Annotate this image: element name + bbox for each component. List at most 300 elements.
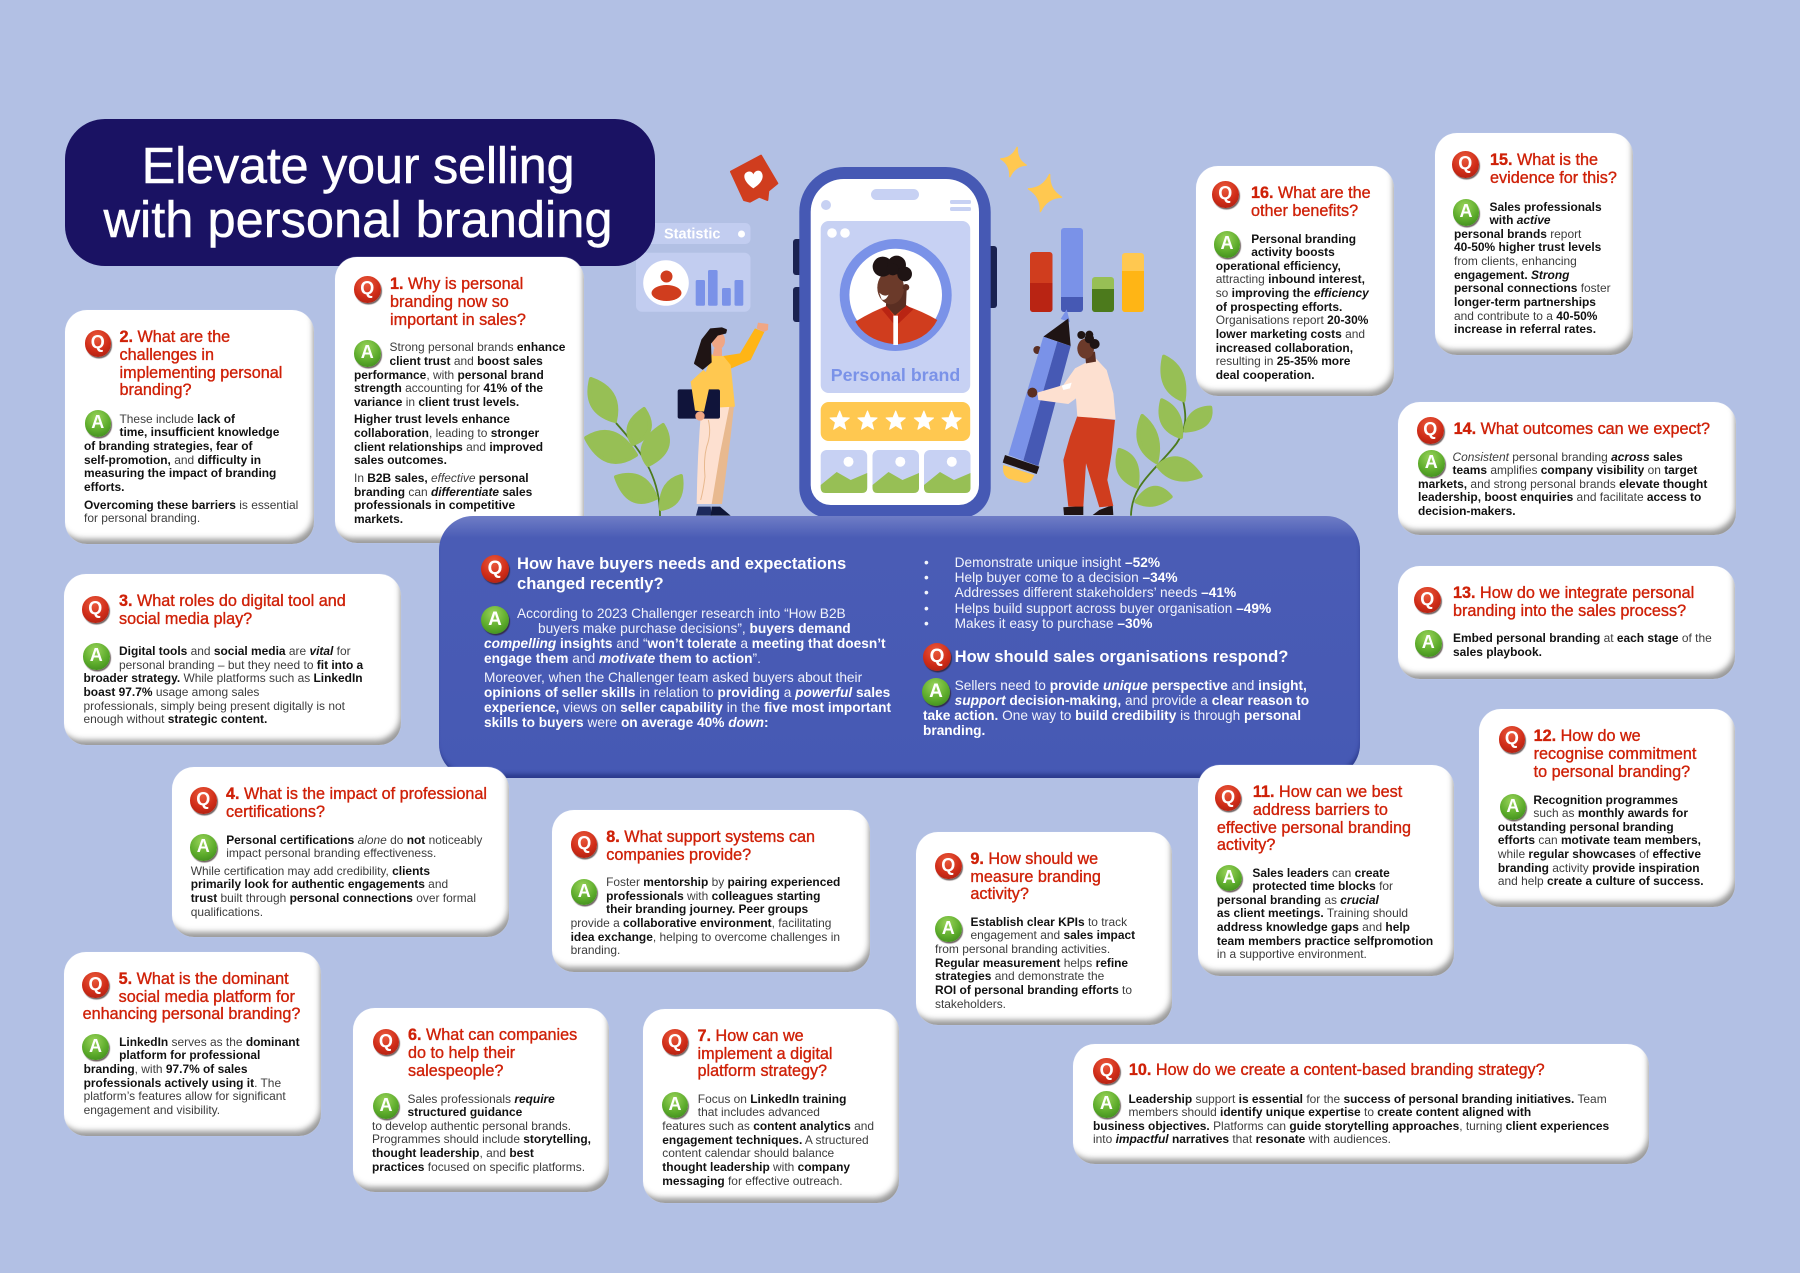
icon: Q badge: Q [668, 1031, 682, 1051]
heading: question 5 [83, 970, 300, 1023]
text: answer 2 [84, 412, 298, 525]
text: answer 9: Regular measurement helps refine [935, 956, 1128, 970]
text: answer 14: Consistent personal branding across sales [1452, 450, 1683, 464]
heading: question 4: certifications? [226, 803, 325, 821]
text: Challenger research answer: experience, views on seller capability in the five most important [484, 700, 891, 715]
text: answer 7: features such as content analytics and [662, 1119, 874, 1133]
heading: question 12: 12. How do we [1534, 727, 1641, 745]
icon: statistic widget [636, 223, 750, 312]
title banner: with personal branding [103, 190, 613, 248]
heading: question 1 [390, 275, 526, 329]
heading: question 5: enhancing personal branding? [83, 1005, 300, 1023]
text: answer 15: personal connections foster [1454, 281, 1611, 295]
text: answer 16: attracting inbound interest, [1216, 272, 1365, 286]
text: Challenger research answer: opinions of seller skills in relation to providing a powerful sales [484, 685, 890, 700]
text: answer 9: stakeholders. [935, 997, 1006, 1011]
text: answer 14: teams amplifies company visibility on target [1452, 463, 1697, 477]
text: answer 13 [1453, 631, 1712, 659]
text: answer 11: protected time blocks for [1252, 879, 1393, 893]
icon: Q badge: Q [930, 646, 944, 667]
panel: question 1 why personal branding matters [335, 257, 584, 543]
bar chart: coloured bars [1030, 228, 1144, 312]
text: answer 10 [1093, 1092, 1609, 1146]
text: answer 12: efforts can motivate team members, [1498, 833, 1701, 847]
icon: A badge [1214, 231, 1240, 258]
icon: Q badge [190, 787, 216, 814]
text: answer 12 [1498, 792, 1704, 888]
text: answer 1: client relationships and improved [354, 440, 543, 454]
panel: question 10 content strategy [1073, 1044, 1649, 1164]
icon: Q badge: Q [89, 974, 103, 994]
text: answer 16: Organisations report 20-30% [1216, 313, 1368, 327]
icon: profile portrait [855, 256, 937, 345]
text: answer 16: deal cooperation. [1216, 368, 1315, 382]
icon: A badge: A [379, 1095, 392, 1115]
text: sales organisations answer: take action. One way to build credibility is through personal [923, 708, 1301, 723]
text: answer 6: Sales professionals require [408, 1092, 555, 1106]
icon: A badge [571, 879, 597, 905]
icon: A badge: A [1459, 201, 1472, 221]
text: answer 15: and contribute to a 40-50% [1454, 309, 1597, 323]
heading: question 13 [1453, 584, 1694, 620]
text: answer 6: practices focused on specific platforms. [372, 1160, 585, 1174]
text: answer 6: structured guidance [408, 1105, 522, 1119]
icon: A badge [190, 834, 216, 860]
heading: question 2: challenges in [120, 346, 214, 364]
text: answer 1 [354, 340, 565, 526]
heading: question 16 [1251, 184, 1371, 220]
text: answer 15: from clients, enhancing [1454, 254, 1577, 268]
icon: Q badge: Q [1505, 728, 1519, 748]
text: answer 1: performance, with personal brand [354, 368, 544, 382]
text: answer 15: engagement. Strong [1454, 268, 1569, 282]
heading: question 10: 10. How do we create a content-based branding strategy? [1129, 1061, 1545, 1079]
text: sales organisations answer [923, 678, 1309, 738]
icon: Q badge [1414, 587, 1440, 613]
heading: buyers needs question: How have buyers needs and expectations [517, 554, 846, 573]
icon: A badge: A [1506, 796, 1519, 816]
icon: A badge: A [942, 918, 955, 938]
icon: A badge [1415, 630, 1442, 657]
icon: A badge [1453, 199, 1479, 226]
text: answer 11: personal branding as crucial [1217, 893, 1379, 907]
text: answer 14: decision-makers. [1418, 504, 1516, 518]
icon: Q badge [1212, 181, 1238, 208]
icon: smartphone with personal brand profile [793, 167, 997, 518]
text: answer 9 [935, 915, 1135, 1011]
text: answer 5: engagement and visibility. [84, 1103, 220, 1117]
text: answer 6: thought leadership, and best [372, 1146, 534, 1160]
heading: question 3: social media play? [119, 610, 252, 628]
text: answer 7: thought leadership with company [662, 1160, 850, 1174]
text: answer 15: 40-50% higher trust levels [1454, 240, 1601, 254]
icon: Q badge [662, 1029, 688, 1055]
icon: Q badge [354, 276, 380, 302]
text: answer 6 [372, 1092, 591, 1174]
text: answer 15: personal brands report [1454, 227, 1581, 241]
icon: A badge [83, 643, 110, 670]
heading: question 4 [226, 785, 487, 821]
icon: Q badge: Q [1218, 183, 1232, 203]
text: answer 12: branding activity provide inspiration [1498, 861, 1700, 875]
heading: question 15: evidence for this? [1490, 169, 1617, 187]
icon: A badge: A [91, 412, 104, 432]
list: seller skill declines [924, 555, 1271, 631]
text: answer 1: collaboration, leading to stronger [354, 426, 539, 440]
text: answer 16: of prospecting efforts. [1216, 300, 1342, 314]
text: answer 4: impact personal branding effectiveness. [226, 846, 436, 860]
text: answer 16: resulting in 25-35% more [1216, 354, 1350, 368]
text: answer 3: Digital tools and social media are vital for [119, 644, 351, 658]
icon: man with big pencil [1003, 309, 1116, 515]
text: sales organisations answer: branding. [923, 723, 985, 738]
icon: right plant [1118, 357, 1211, 516]
text: answer 8: provide a collaborative environment, facilitating [571, 916, 831, 930]
icon: A badge: A [1100, 1093, 1113, 1113]
title banner: Elevate your selling [142, 136, 574, 194]
heading: question 7: platform strategy? [697, 1062, 827, 1080]
panel: question 11 addressing barriers: activity? [1217, 836, 1275, 854]
heading: question 8: 8. What support systems can [606, 828, 815, 846]
icon: A badge [354, 340, 380, 366]
text: answer 11: team members practice selfpromotion [1217, 934, 1433, 948]
heading: question 9: measure branding [970, 868, 1101, 886]
text: answer 14: markets, and strong personal brands elevate thought [1418, 477, 1707, 491]
heading: question 12 [1534, 727, 1696, 781]
icon: Q badge [1499, 726, 1525, 752]
text: answer 7: engagement techniques. A structured [662, 1133, 869, 1147]
list: seller skill declines: • [924, 570, 929, 585]
text: answer 16: so improving the efficiency [1216, 286, 1369, 300]
heading: question 5: 5. What is the dominant [119, 970, 289, 988]
heading: question 15 [1490, 151, 1617, 187]
text: Challenger research answer: buyers make purchase decisions”, buyers demand [538, 621, 851, 636]
text: answer 5: LinkedIn serves as the dominant [119, 1035, 300, 1049]
icon: sparkle stars [997, 144, 1066, 216]
icon: Q badge: Q [1458, 153, 1472, 173]
heading: question 13: 13. How do we integrate personal [1453, 584, 1694, 602]
text: answer 1: Strong personal brands enhance [390, 340, 565, 354]
icon: left plant [586, 379, 682, 516]
text: answer 4: While certification may add credibility, clients [191, 864, 430, 878]
text: answer 4: primarily look for authentic engagements and [191, 877, 448, 891]
text: answer 16 [1216, 232, 1370, 382]
icon: smartphone with personal brand profile: Personal brand [831, 365, 960, 385]
heading: question 14: 14. What outcomes can we expect? [1454, 420, 1710, 438]
text: answer 16: Personal branding [1251, 232, 1356, 246]
icon: Q badge [1417, 417, 1444, 444]
icon: Q badge [935, 853, 962, 879]
panel: question 12 recognising commitment [1479, 709, 1735, 907]
text: answer 8 [571, 875, 840, 957]
icon: A badge: A [89, 1036, 102, 1056]
text: answer 10: Leadership support is essential for the success of personal branding initiatives. Team [1128, 1092, 1607, 1106]
list: seller skill declines: Addresses different stakeholders’ needs –41% [955, 585, 1236, 600]
panel: central buyers needs section [439, 516, 1360, 778]
icon: A badge: A [90, 645, 103, 665]
text: answer 9: Establish clear KPIs to track [970, 915, 1127, 929]
panel: question 8 support systems [552, 810, 870, 972]
icon: A badge [1418, 450, 1444, 476]
text: answer 5: professionals actively using it. The [84, 1076, 281, 1090]
icon: A badge [922, 678, 950, 706]
text: answer 1: In B2B sales, effective personal [354, 471, 529, 485]
heading: buyers needs question [517, 554, 846, 593]
heading: question 1: 1. Why is personal [390, 275, 523, 293]
text: answer 2: of branding strategies, fear of [84, 439, 252, 453]
text: answer 5: platform for professional [119, 1048, 260, 1062]
text: answer 9: engagement and sales impact [970, 928, 1135, 942]
text: answer 13: Embed personal branding at each stage of the [1453, 631, 1712, 645]
text: answer 8: Foster mentorship by pairing experienced [606, 875, 840, 889]
icon: Q badge: Q [941, 855, 955, 875]
icon: Q badge [1452, 151, 1478, 178]
heading: question 11: effective personal branding [1217, 819, 1411, 837]
text: answer 4: Personal certifications alone do not noticeably [226, 832, 482, 846]
heading: question 7: implement a digital [697, 1045, 832, 1063]
icon: Q badge: Q [1420, 589, 1434, 609]
heading: question 12: recognise commitment [1534, 745, 1696, 763]
heading: question 4: 4. What is the impact of professional [226, 785, 487, 803]
text: answer 7: content calendar should balance [662, 1146, 834, 1160]
text: answer 1: variance in client trust levels. [354, 395, 519, 409]
icon: Q badge: Q [88, 598, 102, 618]
heading: question 6: do to help their [408, 1044, 515, 1062]
text: sales organisations answer: Sellers need to provide unique perspective and insight, [955, 678, 1307, 692]
icon: Q badge: Q [1221, 787, 1235, 807]
text: answer 12: while regular showcases of effective [1498, 847, 1701, 861]
heading: question 9: activity? [970, 885, 1029, 903]
icon: A badge [935, 916, 962, 942]
text: answer 10: business objectives. Platforms can guide storytelling approaches, turning client experiences [1093, 1119, 1609, 1133]
text: Challenger research answer: compelling insights and “won’t tolerate a meeting that doesn’t [484, 636, 886, 651]
list: seller skill declines: Helps build support across buyer organisation –49% [955, 601, 1271, 616]
heading: question 11 [1217, 783, 1411, 854]
icon: A badge [1500, 794, 1526, 820]
icon: Q badge [923, 643, 951, 671]
text: answer 4 [190, 832, 482, 919]
icon: A badge [1093, 1091, 1120, 1118]
text: answer 15: increase in referral rates. [1454, 322, 1596, 336]
icon: Q badge [84, 330, 111, 356]
panel: question 11 addressing barriers [1198, 765, 1454, 976]
text: answer 2: measuring the impact of branding [84, 466, 276, 480]
list: seller skill declines: • [924, 585, 929, 600]
heading: question 15: 15. What is the [1490, 151, 1598, 169]
heading: question 13: branding into the sales process? [1453, 602, 1686, 620]
icon: Q badge: Q [1423, 419, 1437, 439]
text: answer 11: address knowledge gaps and help [1217, 920, 1410, 934]
text: answer 4: trust built through personal connections over formal [191, 891, 476, 905]
heading: question 9 [970, 850, 1101, 903]
text: answer 4: qualifications. [191, 905, 263, 919]
icon: Q badge: Q [360, 278, 374, 298]
text: answer 11 [1217, 866, 1433, 961]
text: answer 1: markets. [354, 512, 403, 526]
text: sales organisations answer: support decision-making, and provide a clear reason to [955, 693, 1309, 708]
heading: question 2 [120, 328, 282, 399]
icon: A badge [373, 1093, 399, 1119]
text: answer 13: sales playbook. [1453, 645, 1542, 659]
heading: question 3 [119, 592, 346, 628]
heading: question 3: 3. What roles do digital tool and [119, 592, 346, 610]
icon: Q badge [82, 596, 108, 622]
text: answer 11: Sales leaders can create [1252, 866, 1390, 880]
heading: question 12: to personal branding? [1534, 763, 1690, 781]
icon: Q badge [82, 972, 109, 998]
heading: question 16: other benefits? [1251, 202, 1358, 220]
text: answer 1: Higher trust levels enhance [354, 412, 510, 426]
heading: question 1: important in sales? [390, 311, 526, 329]
panel: question 13 integrating into sales process [1398, 566, 1735, 679]
list: seller skill declines: • [924, 616, 929, 631]
text: answer 16: activity boosts [1251, 245, 1335, 259]
text: answer 15: Sales professionals [1490, 200, 1602, 214]
icon: A badge: A [1422, 632, 1435, 652]
heading: question 1: branding now so [390, 293, 509, 311]
heading: question 16: 16. What are the [1251, 184, 1371, 202]
icon: Q badge: Q [196, 789, 210, 809]
panel: question 4 certifications [172, 767, 509, 937]
heading: question 2: 2. What are the [120, 328, 230, 346]
icon: A badge [662, 1092, 688, 1118]
icon: Q badge: Q [379, 1031, 393, 1051]
text: answer 12: Recognition programmes [1533, 792, 1678, 806]
text: answer 1: professionals in competitive [354, 498, 515, 512]
icon: Q badge: Q [488, 558, 502, 579]
list: seller skill declines: • [924, 601, 929, 616]
text: answer 9: strategies and demonstrate the [935, 969, 1104, 983]
panel: question 5 dominant platform [64, 952, 321, 1136]
icon: A badge: A [197, 836, 210, 856]
panel: question 6 helping salespeople [353, 1008, 609, 1192]
text: answer 16: operational efficiency, [1216, 259, 1341, 273]
icon: A badge: A [578, 881, 591, 901]
text: answer 6: to develop authentic personal brands. [372, 1119, 571, 1133]
icon: A badge: A [669, 1094, 682, 1114]
heading: question 8 [606, 828, 815, 864]
icon: Q badge [1215, 785, 1241, 811]
heading: question 9: 9. How should we [970, 850, 1098, 868]
text: answer 9: from personal branding activities. [935, 942, 1110, 956]
text: answer 15: with active [1490, 213, 1551, 227]
text: answer 8: idea exchange, helping to overcome challenges in [571, 930, 840, 944]
icon: woman holding tablet [678, 323, 768, 516]
text: answer 2: for personal branding. [84, 511, 200, 525]
text: answer 5 [84, 1035, 300, 1117]
heading: sales organisations question: How should sales organisations respond? [955, 647, 1288, 666]
text: Challenger research answer [484, 606, 891, 730]
text: answer 3 [84, 644, 364, 726]
icon: A badge [82, 1034, 109, 1060]
icon: A badge: A [1223, 867, 1236, 887]
text: answer 10: into impactful narratives that resonate with audiences. [1093, 1132, 1391, 1146]
text: answer 16: lower marketing costs and [1216, 327, 1365, 341]
text: answer 7: that includes advanced [698, 1105, 820, 1119]
text: answer 1: branding can differentiate sales [354, 485, 532, 499]
text: answer 3: boast 97.7% usage among sales [84, 685, 259, 699]
icon: statistic widget: Statistic [664, 226, 720, 242]
text: answer 8: professionals with colleagues starting [606, 889, 820, 903]
icon: A badge [481, 606, 509, 634]
text: answer 11: in a supportive environment. [1217, 947, 1367, 961]
heading: question 6: 6. What can companies [408, 1026, 577, 1044]
icon: Q badge [481, 555, 509, 583]
icon: Q badge [1093, 1058, 1120, 1084]
text: answer 10: members should identify unique expertise to create content aligned with [1128, 1105, 1531, 1119]
text: answer 3: enough without strategic content. [84, 712, 267, 726]
heading: question 5: social media platform for [119, 988, 295, 1006]
panel: question 2 challenges [64, 310, 314, 544]
icon: Q badge: Q [577, 833, 591, 853]
icon: A badge: A [1221, 233, 1234, 253]
icon: A badge: A [1425, 452, 1438, 472]
icon: A badge: A [361, 342, 374, 362]
panel: question 16 other benefits [1196, 166, 1394, 396]
icon: A badge: A [488, 609, 502, 630]
text: answer 16: increased collaboration, [1216, 341, 1353, 355]
heading: question 6 [408, 1026, 577, 1080]
icon: heart notification bubble [731, 156, 777, 202]
text: Challenger research answer: engage them and motivate them to action”. Moreover, when the Challenger team asked buyers about their [484, 651, 862, 685]
icon: Q badge [373, 1029, 399, 1055]
heading: question 2: branding? [120, 381, 192, 399]
panel: question 3 digital tools [64, 574, 401, 745]
text: answer 15 [1454, 200, 1611, 336]
text: answer 3: broader strategy. While platforms such as LinkedIn [84, 671, 363, 685]
text: answer 12: outstanding personal branding [1498, 820, 1674, 834]
text: answer 2: time, insufficient knowledge [120, 425, 279, 439]
text: answer 12: and help create a culture of success. [1498, 874, 1704, 888]
heading: question 7 [697, 1027, 832, 1080]
heading: question 11: 11. How can we best [1253, 783, 1402, 801]
text: answer 8: branding. [571, 943, 620, 957]
icon: Q badge: Q [91, 332, 105, 352]
text: answer 7 [662, 1092, 874, 1188]
text: Challenger research answer: According to 2023 Challenger research into “How B2B [517, 606, 846, 620]
text: answer 7: Focus on LinkedIn training [698, 1092, 846, 1106]
panel: question 14 expected outcomes [1398, 402, 1736, 535]
text: answer 8: their branding journey. Peer groups [606, 902, 808, 916]
text: answer 3: professionals, simply being present digitally is not [84, 699, 345, 713]
text: answer 1: sales outcomes. [354, 453, 447, 467]
panel: question 9 measuring activity [916, 832, 1172, 1025]
text: answer 1: client trust and boost sales [390, 354, 543, 368]
icon: A badge: A [929, 681, 943, 702]
heading: question 7: 7. How can we [697, 1027, 804, 1045]
text: answer 5: branding, with 97.7% of sales [84, 1062, 247, 1076]
icon: A badge [84, 410, 111, 436]
heading: question 11: address barriers to [1253, 801, 1388, 819]
text: answer 2: efforts. [84, 480, 124, 494]
panel: question 15 evidence [1435, 133, 1633, 355]
text: answer 14: leadership, boost enquiries and facilitate access to [1418, 490, 1701, 504]
heading: buyers needs question: changed recently? [517, 574, 664, 593]
text: answer 1: strength accounting for 41% of the [354, 381, 543, 395]
list: seller skill declines: Help buyer come to a decision –34% [955, 570, 1178, 585]
panel: question 7 digital platform strategy [643, 1009, 899, 1203]
list: seller skill declines: Makes it easy to purchase –30% [955, 616, 1152, 631]
icon: Q badge [571, 831, 597, 858]
list: seller skill declines: • [924, 555, 929, 570]
text: answer 11: as client meetings. Training should [1217, 906, 1408, 920]
text: answer 7: messaging for effective outreach. [662, 1174, 843, 1188]
text: answer 5: platform’s features allow for significant [84, 1089, 286, 1103]
text: answer 6: Programmes should include storytelling, [372, 1132, 591, 1146]
title banner [64, 119, 654, 266]
text: answer 3: personal branding – but they need to fit into a [119, 658, 363, 672]
text: answer 12: such as monthly awards for [1533, 806, 1688, 820]
